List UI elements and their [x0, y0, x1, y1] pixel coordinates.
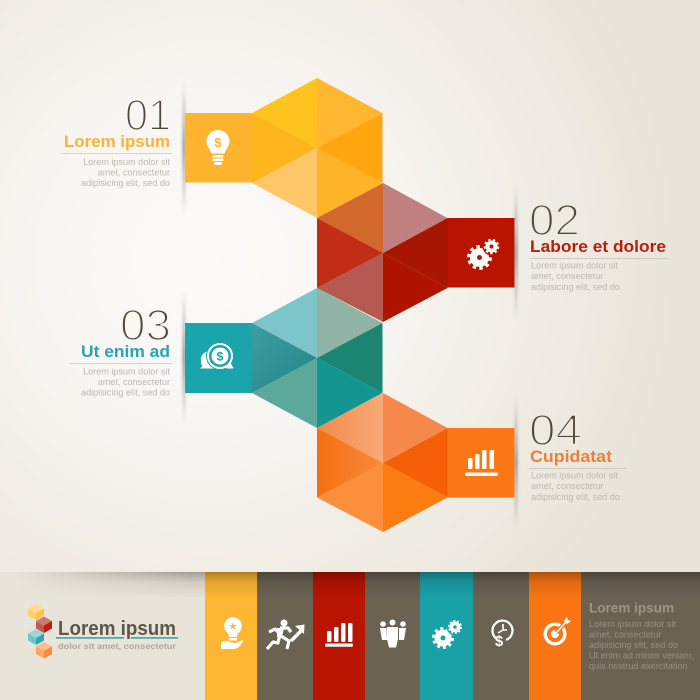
rule [529, 258, 669, 259]
icon: hand holding bulb [221, 617, 243, 649]
panel: step 3 teal [70, 288, 382, 428]
logo: stacked cubes [28, 604, 52, 658]
icon: team of people [380, 620, 406, 648]
logo tagline: dolor sit amet, consectetur [58, 641, 177, 651]
stripes [205, 572, 700, 700]
tab: teal [185, 323, 253, 393]
bottom description: Lorem ipsum dolor sit [589, 619, 676, 629]
heading: Labore et dolore: Labore et dolore [530, 237, 666, 256]
icon: light bulb with dollar [206, 130, 230, 165]
bottom description: Ut enim ad minim veniam, [589, 650, 694, 660]
rule [60, 153, 172, 154]
rule [70, 363, 172, 364]
description 2: amet, consectetur [531, 271, 603, 281]
description 4: adipisicing elit, sed do [531, 492, 620, 502]
icon: gears [469, 238, 500, 268]
hexagon: red [317, 183, 448, 322]
divider shadow 4 [514, 395, 518, 530]
heading: Cupidatat: Cupidatat [530, 447, 612, 466]
tab: orange [447, 428, 514, 498]
bottom description: adipisicing elit, sed do [589, 640, 678, 650]
description 4: Lorem ipsum dolor sit [531, 470, 618, 480]
icon: gears small [434, 618, 464, 648]
cube red [36, 616, 52, 633]
hexagon: orange [317, 393, 448, 532]
logo title: Lorem ipsum [58, 618, 176, 640]
icon: light bulb with dollar: $ [214, 135, 222, 150]
paper shadow [34, 572, 700, 593]
cube yellow [28, 604, 44, 620]
icon: hand holding bulb: ★ [229, 622, 238, 632]
rule [529, 468, 626, 469]
tab: yellow [185, 113, 253, 182]
icon: bar chart small [325, 623, 353, 647]
bottom description: amet, consectetur [589, 630, 661, 640]
icon: time is money [492, 621, 512, 650]
panel: step 4 orange [317, 393, 626, 532]
tab: red [447, 218, 514, 288]
description 2: Lorem ipsum dolor sit [531, 260, 618, 270]
icon: speech bubbles with dollar [200, 342, 234, 370]
description 4: amet, consectetur [531, 481, 603, 491]
cube orange [36, 642, 52, 658]
cube teal [28, 629, 44, 645]
panel: step 2 red [317, 183, 669, 322]
number 03: 03 [120, 301, 171, 350]
icon: target with arrow [545, 617, 571, 644]
hexagon: teal [252, 288, 382, 428]
number 02: 02 [529, 196, 580, 245]
bottom heading: Lorem ipsum [589, 600, 674, 616]
panel: step 1 yellow [60, 78, 382, 218]
number 01: 01 [125, 91, 171, 140]
description 1: Lorem ipsum dolor sit [83, 157, 170, 167]
heading: Ut enim ad: Ut enim ad [81, 342, 170, 361]
number 04: 04 [529, 406, 582, 455]
divider shadow 3 [182, 290, 186, 425]
bottom band [0, 572, 700, 700]
description 3: amet, consectetur [98, 377, 170, 387]
description 3: Lorem ipsum dolor sit [83, 366, 170, 376]
divider shadow 1 [182, 80, 186, 215]
description 3: adipisicing elit, sed do [81, 388, 170, 398]
logo underline [56, 637, 178, 639]
description 1: amet, consectetur [98, 168, 170, 178]
icon: runner with arrow [267, 620, 304, 649]
icon: time is money: $ [495, 633, 504, 650]
bottom description: quis nostrud exercitation [589, 661, 688, 671]
heading: Lorem ipsum: Lorem ipsum [64, 132, 170, 151]
description 1: adipisicing elit, sed do [81, 178, 170, 188]
icon: bar chart [465, 450, 498, 476]
description 2: adipisicing elit, sed do [531, 282, 620, 292]
divider shadow 2 [514, 185, 518, 320]
icon: speech bubbles with dollar: $ [217, 350, 224, 364]
hexagon: yellow [252, 78, 382, 218]
